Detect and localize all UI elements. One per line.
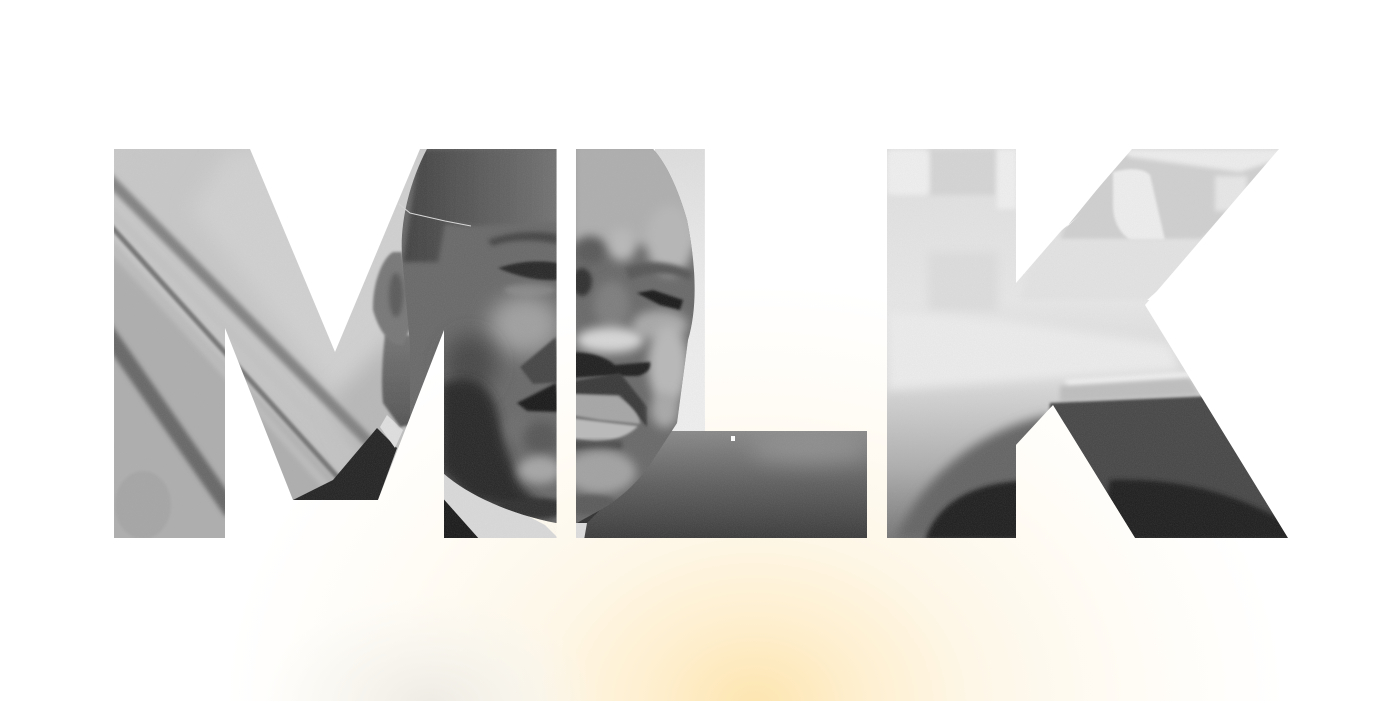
right: brow — [625, 262, 692, 280]
photo: face — [402, 149, 695, 523]
left: chin — [518, 456, 562, 484]
right: under lip — [570, 441, 622, 450]
right: furrow — [574, 236, 606, 264]
right: forehead — [576, 149, 691, 250]
left: jaw shadow — [444, 335, 496, 395]
left: eye — [498, 261, 558, 280]
photo: inner ear — [389, 273, 403, 317]
right: bridge and cheek — [594, 281, 630, 329]
photo: ear — [371, 250, 409, 337]
left: mouth surround — [506, 414, 530, 442]
photo: backdrop behind L — [570, 140, 870, 541]
photo: neck — [380, 334, 410, 428]
left: nose shadow — [520, 337, 560, 384]
photo: stair rails behind M — [114, 149, 427, 538]
lettering: MLK filled with photograph — [100, 140, 1300, 560]
right: chin — [564, 450, 636, 494]
left: hair — [403, 149, 560, 262]
poster: MLK photo lettering — [114, 149, 1288, 701]
right: lips — [570, 394, 640, 424]
photo: aircraft behind K — [880, 140, 1300, 540]
right: nostril shadow — [570, 352, 650, 378]
photo: hairline highlight — [399, 204, 471, 226]
photo: suit and collar — [293, 415, 600, 540]
right: nose — [576, 327, 644, 353]
right: moustache — [570, 373, 647, 427]
photo: film grain — [110, 145, 1295, 541]
left: cheek — [489, 295, 561, 355]
left: moustache — [517, 383, 560, 412]
left: brow — [488, 232, 558, 246]
right: eye — [637, 290, 683, 310]
